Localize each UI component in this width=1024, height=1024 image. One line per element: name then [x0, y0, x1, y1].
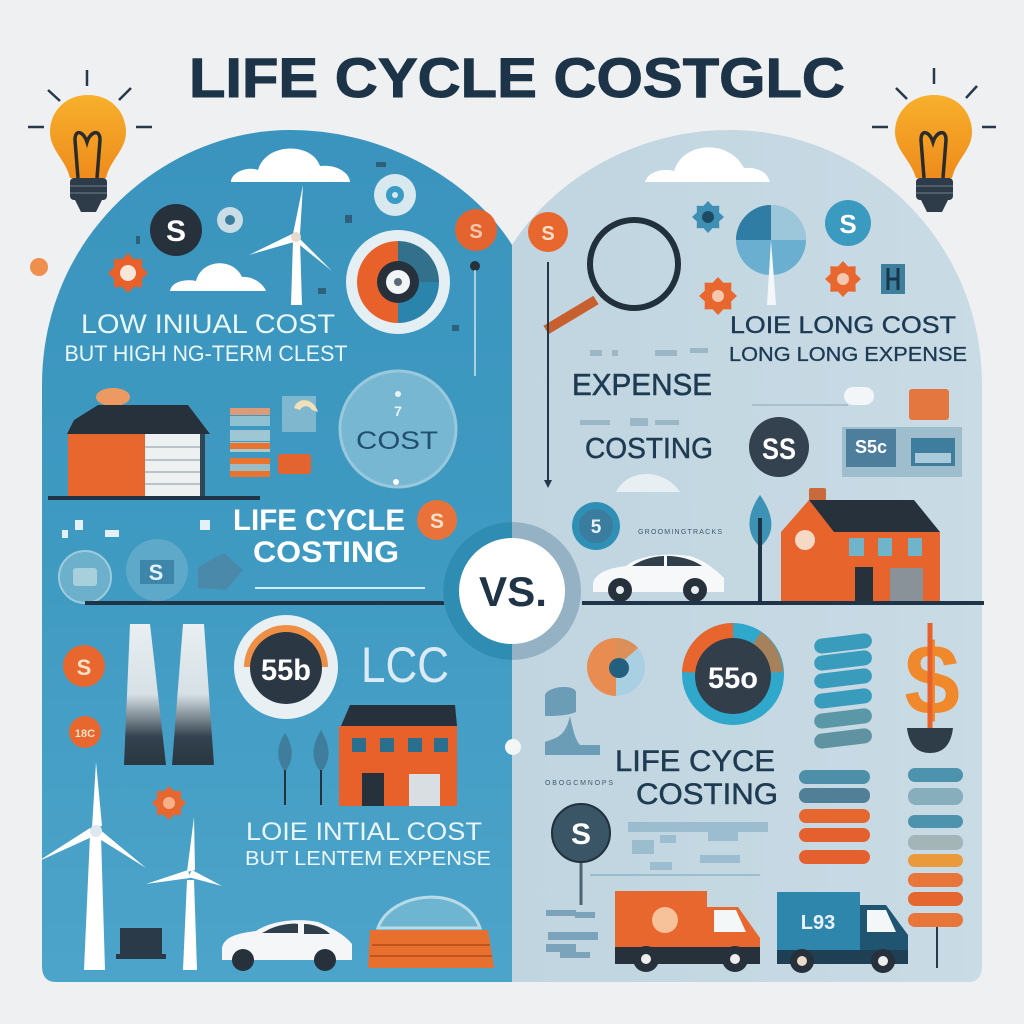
- chart: pill list middle: [799, 770, 870, 864]
- icon: white car right: [593, 555, 724, 602]
- icon: orange box and pill: [752, 387, 949, 420]
- heading: LCC: LCC: [361, 637, 449, 693]
- icon: sign boards: [842, 427, 962, 477]
- heading: low initial cost bottom: LOIE INTIAL COST: [246, 818, 482, 846]
- icon: orange house: [339, 705, 457, 806]
- icon: coin orange left: S: [77, 655, 91, 680]
- icon: dollar pin: [552, 804, 610, 905]
- icon: pale gear: [374, 174, 416, 216]
- icon: dollar pin: S: [571, 818, 591, 851]
- chart: 55% donut left: 55b: [261, 654, 311, 687]
- vs badge: VS.: [479, 568, 547, 615]
- icon: trees: [278, 730, 329, 805]
- icon: faded coins row: S: [149, 560, 163, 585]
- icon: SS coin: SS: [762, 433, 796, 466]
- icon: small orange badge: [69, 716, 101, 748]
- icon: faded chart band: [590, 822, 768, 876]
- panel: left side: [37, 130, 512, 982]
- text: high long-term cost: BUT HIGH NG-TERM CLEST: [64, 341, 348, 366]
- text: long expense: LONG LONG EXPENSE: [729, 344, 967, 366]
- icon: faded coins row: [59, 520, 243, 603]
- icon: small H box: [881, 264, 905, 294]
- icon: SS coin: [749, 417, 809, 477]
- chart: pie with turbine: [736, 205, 806, 305]
- chart: teal stacked pills: [813, 633, 873, 749]
- icon: pin line: [470, 261, 480, 376]
- divider: left upper: [48, 496, 260, 500]
- icon: blue gear: [692, 201, 724, 233]
- icon: large wind turbine: [37, 762, 146, 970]
- icon: dollar coin blue: [825, 200, 871, 246]
- icon: cloud top right: [645, 147, 770, 182]
- icon: orange gear coin: [152, 786, 186, 820]
- icon: orange gear: [699, 277, 737, 315]
- icon: monitor: [116, 928, 166, 959]
- icon: magnifying glass: [546, 220, 678, 330]
- heading: life cycle costing right: [615, 745, 778, 811]
- icon: faded lines: [546, 910, 598, 958]
- panel: right side: [512, 130, 984, 982]
- icon: small pale badge: [217, 207, 243, 233]
- icon: dollar coin dark: S: [166, 215, 186, 248]
- heading: life cycle costing: [233, 504, 405, 569]
- heading: expense: EXPENSE: [572, 367, 712, 402]
- icon: coin orange left: [63, 645, 105, 687]
- icon: white car left: [222, 920, 352, 971]
- icon: blue truck: [777, 892, 908, 973]
- icon: orange dollar coin: S: [469, 221, 483, 243]
- divider: right: [582, 601, 984, 605]
- icon: blue truck: L93: [801, 912, 835, 934]
- icon: small gear orange: [825, 261, 861, 297]
- chart: 55% donut right: [682, 623, 784, 725]
- timeline axis: [544, 262, 552, 488]
- heading: low initial cost: LOW INIUAL COST: [81, 309, 335, 339]
- small white dot: [505, 739, 521, 755]
- divider: left middle: [85, 601, 445, 605]
- icon: dollar sign: $: [904, 624, 960, 736]
- chart: 55% donut right: 55o: [708, 662, 758, 695]
- heading: long cost: LOIE LONG COST: [730, 312, 956, 339]
- chart: small pie: [587, 638, 645, 696]
- icon: specks left: [136, 162, 459, 331]
- icon: dollar coin blue: S: [839, 209, 857, 239]
- icon: faded figure: [545, 687, 600, 755]
- heading: costing: COSTING: [585, 433, 713, 465]
- icon: small orange badge: 18C: [75, 728, 95, 740]
- text: lentrm expense: BUT LENTEM EXPENSE: [245, 848, 491, 870]
- icon: sign boards: S5c: [855, 437, 887, 457]
- text line: [255, 587, 425, 589]
- icon: cost circle: COST: [356, 427, 438, 455]
- icon: small wind turbine: [146, 817, 222, 970]
- icon: orange dollar coin: [455, 209, 497, 251]
- icon: orange gear: [108, 253, 148, 293]
- icon: factory chimneys: [124, 624, 214, 765]
- icon: cost circle: 7: [394, 403, 402, 419]
- icon: cost circle: [340, 371, 456, 487]
- icon: tree: [749, 495, 771, 602]
- icon: orange coin: [417, 500, 457, 540]
- icon: right light bulb: [872, 68, 996, 212]
- icon: orange coin: S: [541, 223, 555, 245]
- icon: small ring coin: [572, 502, 620, 550]
- icon: orange coin: [528, 212, 568, 252]
- icon: dollar coin dark: [150, 204, 202, 256]
- icon: small ring coin: 5: [591, 517, 602, 538]
- icon: left light bulb: [28, 70, 152, 212]
- icon: orange coin: S: [430, 510, 444, 533]
- icon: stacked bars: [230, 396, 318, 477]
- heading: life cycle costing right: LIFE CYCE: [615, 745, 775, 778]
- heading: life cycle costing right: COSTING: [636, 778, 778, 811]
- title: LIFE CYCLE COSTGLC: [189, 46, 845, 109]
- text: small caption left: OBOGCMNOPS: [545, 780, 613, 787]
- chart: 55% donut left: [234, 615, 338, 719]
- vs badge: [443, 522, 581, 660]
- faded marks: [580, 348, 708, 426]
- icon: faded cloud: [616, 474, 680, 492]
- icon: cloud top left: [231, 148, 350, 182]
- icon: layered stack: [368, 897, 494, 968]
- icon: garage building: [67, 388, 210, 497]
- icon: small orange dot left: [30, 258, 48, 276]
- icon: cloud mid: [170, 263, 266, 291]
- chart: pill list right: [908, 768, 963, 968]
- heading: life cycle costing: LIFE CYCLE: [233, 504, 405, 537]
- heading: life cycle costing: COSTING: [253, 536, 399, 569]
- chart: donut: [346, 230, 450, 334]
- icon: orange truck: [615, 891, 760, 972]
- icon: orange house right: [781, 488, 940, 603]
- icon: wind turbine: [249, 185, 332, 305]
- text: small caption: GROOMINGTRACKS: [638, 529, 722, 536]
